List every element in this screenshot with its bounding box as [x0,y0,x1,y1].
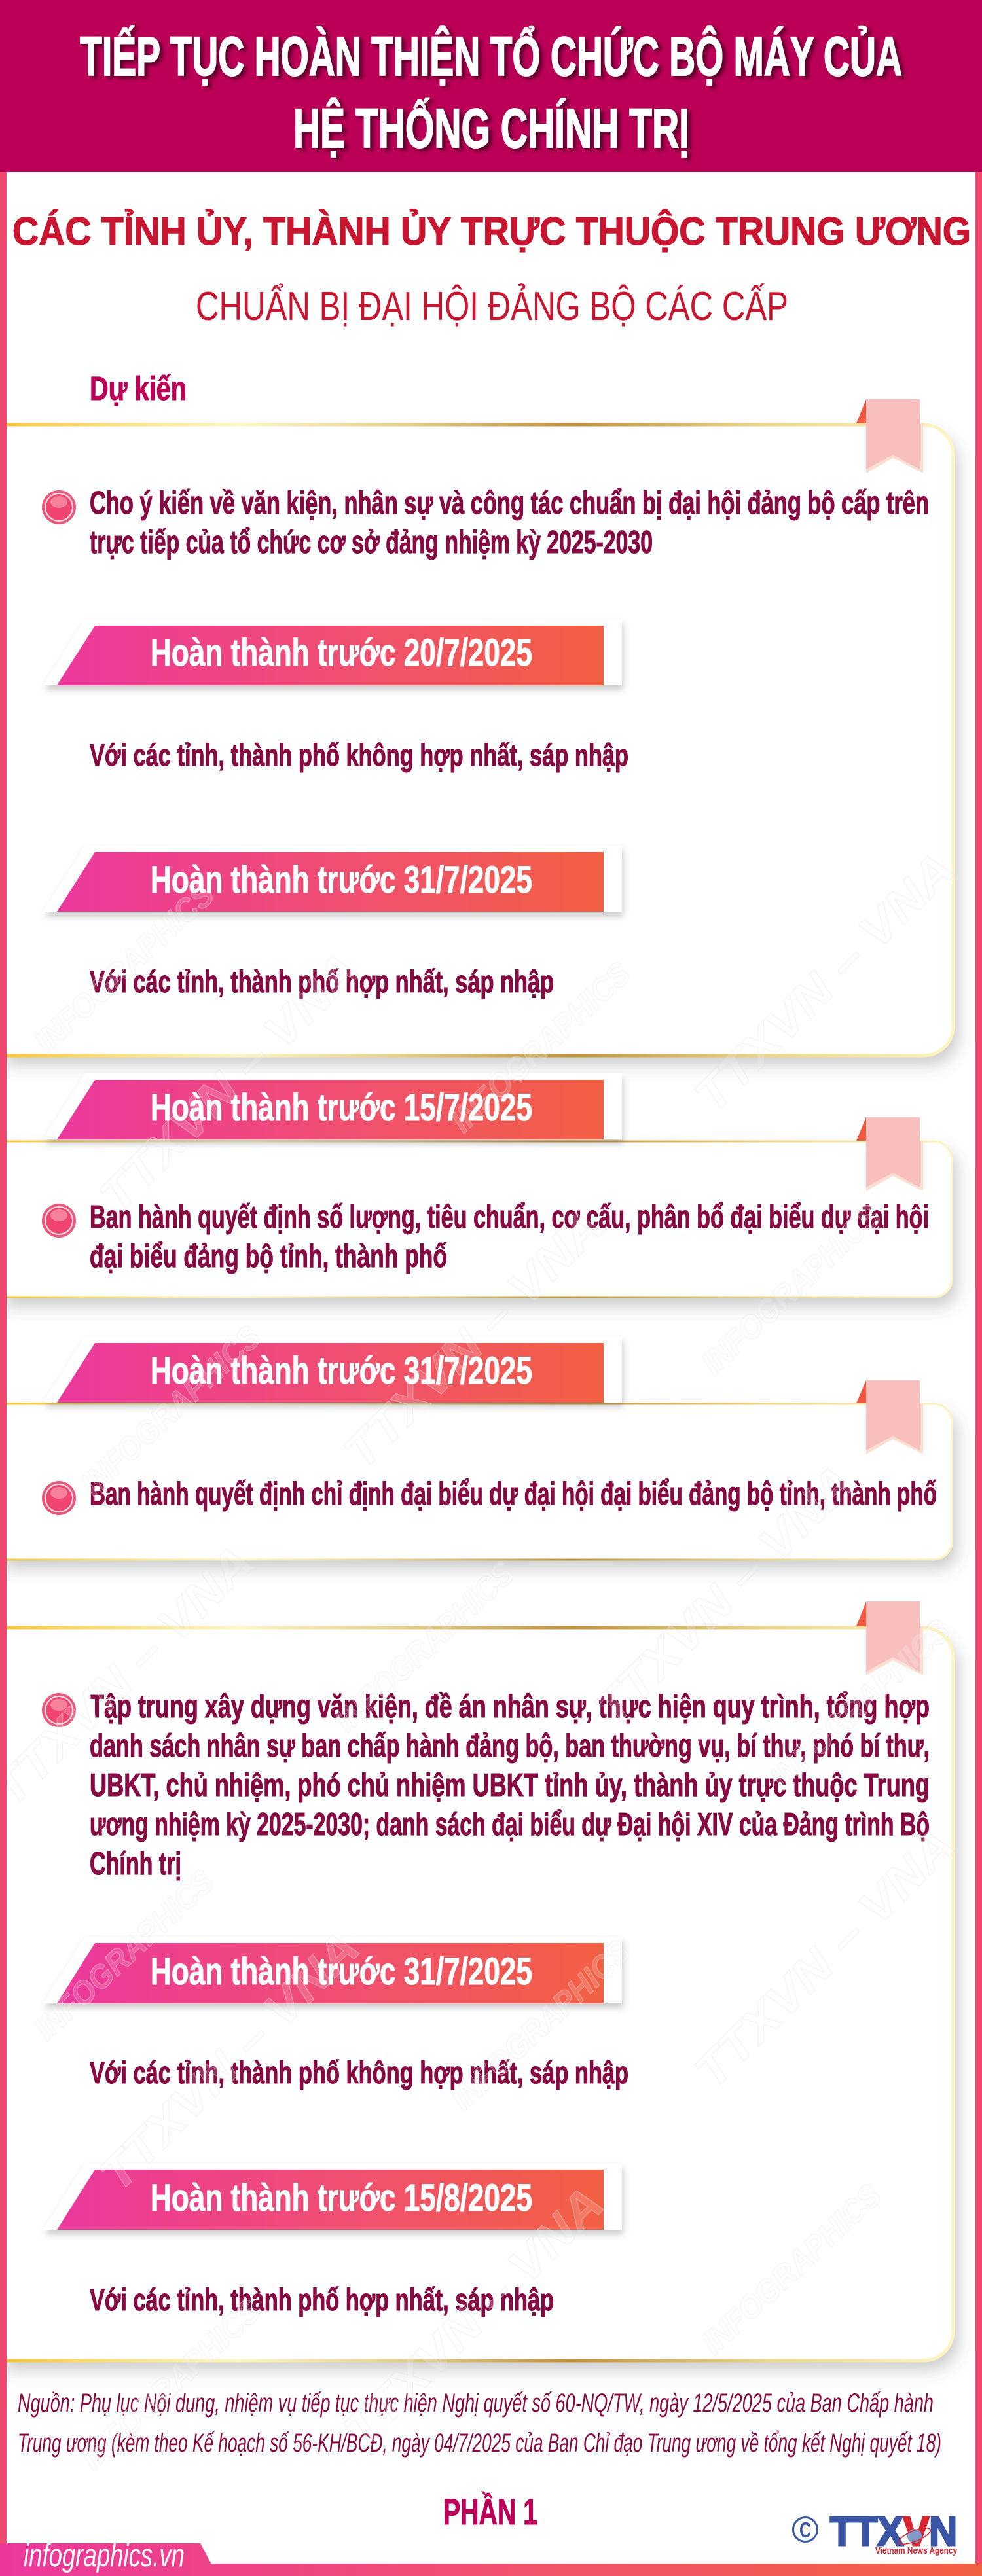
watermarks: INFOGRAPHICS [27,1863,221,2047]
bullet card 1 [42,490,76,524]
watermarks: INFOGRAPHICS [694,1197,888,1382]
watermarks: TTXVN – VNA [685,843,965,1122]
header band [0,0,982,172]
banner: Hoàn thành trước 15/8/2025: Hoàn thành trước 15/8/2025 [151,2177,532,2219]
text: hợp nhất 1: Với các tỉnh, thành phố hợp nhất, sáp nhập [90,964,554,999]
watermarks: INFOGRAPHICS [443,955,638,1139]
text: card 4 description: Chính trị [90,1846,181,1882]
watermarks: INFOGRAPHICS [27,876,221,1060]
watermarks: INFOGRAPHICS [327,1554,522,1739]
label: Dự kiến: Dự kiến [90,370,187,407]
watermarks [0,843,965,2477]
banner: Hoàn thành trước 31/7/2025 (3): Hoàn thành trước 31/7/2025 [151,1950,532,1993]
banner: Hoàn thành trước 15/8/2025 [43,2163,622,2230]
banner: Hoàn thành trước 31/7/2025 (2) [43,1336,622,1403]
source note [18,2389,941,2458]
watermarks: TTXVN – VNA [334,1200,614,1479]
panel: card 3 [0,1380,952,1560]
text: card 2 description [90,1200,929,1274]
text: không hợp nhất 2: Với các tỉnh, thành phố không hợp nhất, sáp nhập [90,2055,628,2090]
banner: Hoàn thành trước 31/7/2025 [43,846,622,912]
banner: Hoàn thành trước 15/7/2025: Hoàn thành trước 15/7/2025 [151,1086,532,1129]
title: HỆ THỐNG CHÍNH TRỊ [293,98,689,159]
text: card 1 description [90,486,929,560]
watermarks: TTXVN – VNA [90,1922,370,2201]
icon: ribbon card 2 [856,1117,923,1191]
subheading: CHUẨN BỊ ĐẠI HỘI ĐẢNG BỘ CÁC CẤP [196,284,788,329]
icon: ribbon card 4 [856,1601,923,1675]
bullet card 4 [42,1693,76,1727]
watermarks: TTXVN – VNA [585,1456,865,1735]
footer tab: infographics.vn: infographics.vn [24,2538,185,2573]
watermarks: INFOGRAPHICS [763,1612,957,1797]
part label: PHẦN 1 [443,2491,537,2532]
bullet card 2 [42,1204,76,1238]
watermarks: TTXVN – VNA [334,2177,614,2457]
icon: ribbon card 1 [856,399,923,473]
watermarks: INFOGRAPHICS [73,1318,268,1503]
banner: Hoàn thành trước 20/7/2025: Hoàn thành trước 20/7/2025 [151,632,532,674]
panel: card 4 [0,1601,953,2361]
bullet card 3 [42,1481,76,1515]
banner: Hoàn thành trước 15/7/2025 [43,1073,622,1139]
logo: TTXVN: TTXVN [830,2509,957,2554]
icon: ribbon card 3 [856,1380,923,1454]
text: card 1 description: trực tiếp của tổ chức cơ sở đảng nhiệm kỳ 2025-2030 [90,525,653,560]
banner: Hoàn thành trước 31/7/2025: Hoàn thành trước 31/7/2025 [151,859,532,901]
text: card 2 description: đại biểu đảng bộ tỉnh, thành phố [90,1239,447,1274]
watermarks: INFOGRAPHICS [443,1933,638,2117]
logo: TTXVN: Vietnam News Agency [875,2546,957,2556]
watermarks: INFOGRAPHICS [694,2177,888,2361]
text: card 4 description [90,1689,930,1882]
footer bar [0,2564,982,2576]
banner: Hoàn thành trước 31/7/2025 (2): Hoàn thành trước 31/7/2025 [151,1350,532,1392]
text: hợp nhất 2: Với các tỉnh, thành phố hợp nhất, sáp nhập [90,2282,554,2317]
title [80,26,902,159]
watermarks: TTXVN – VNA [685,1819,965,2098]
banner: Hoàn thành trước 20/7/2025 [43,619,622,685]
panel: card 1 [0,399,953,1056]
panel: card 2 [0,1117,952,1297]
banner: Hoàn thành trước 31/7/2025 (3) [43,1937,622,2003]
logo: TTXVN: C [799,2518,811,2542]
watermarks: INFOGRAPHICS [73,2292,268,2477]
watermarks: TTXVN – VNA [90,943,370,1223]
text: không hợp nhất 1: Với các tỉnh, thành phố không hợp nhất, sáp nhập [90,738,628,772]
